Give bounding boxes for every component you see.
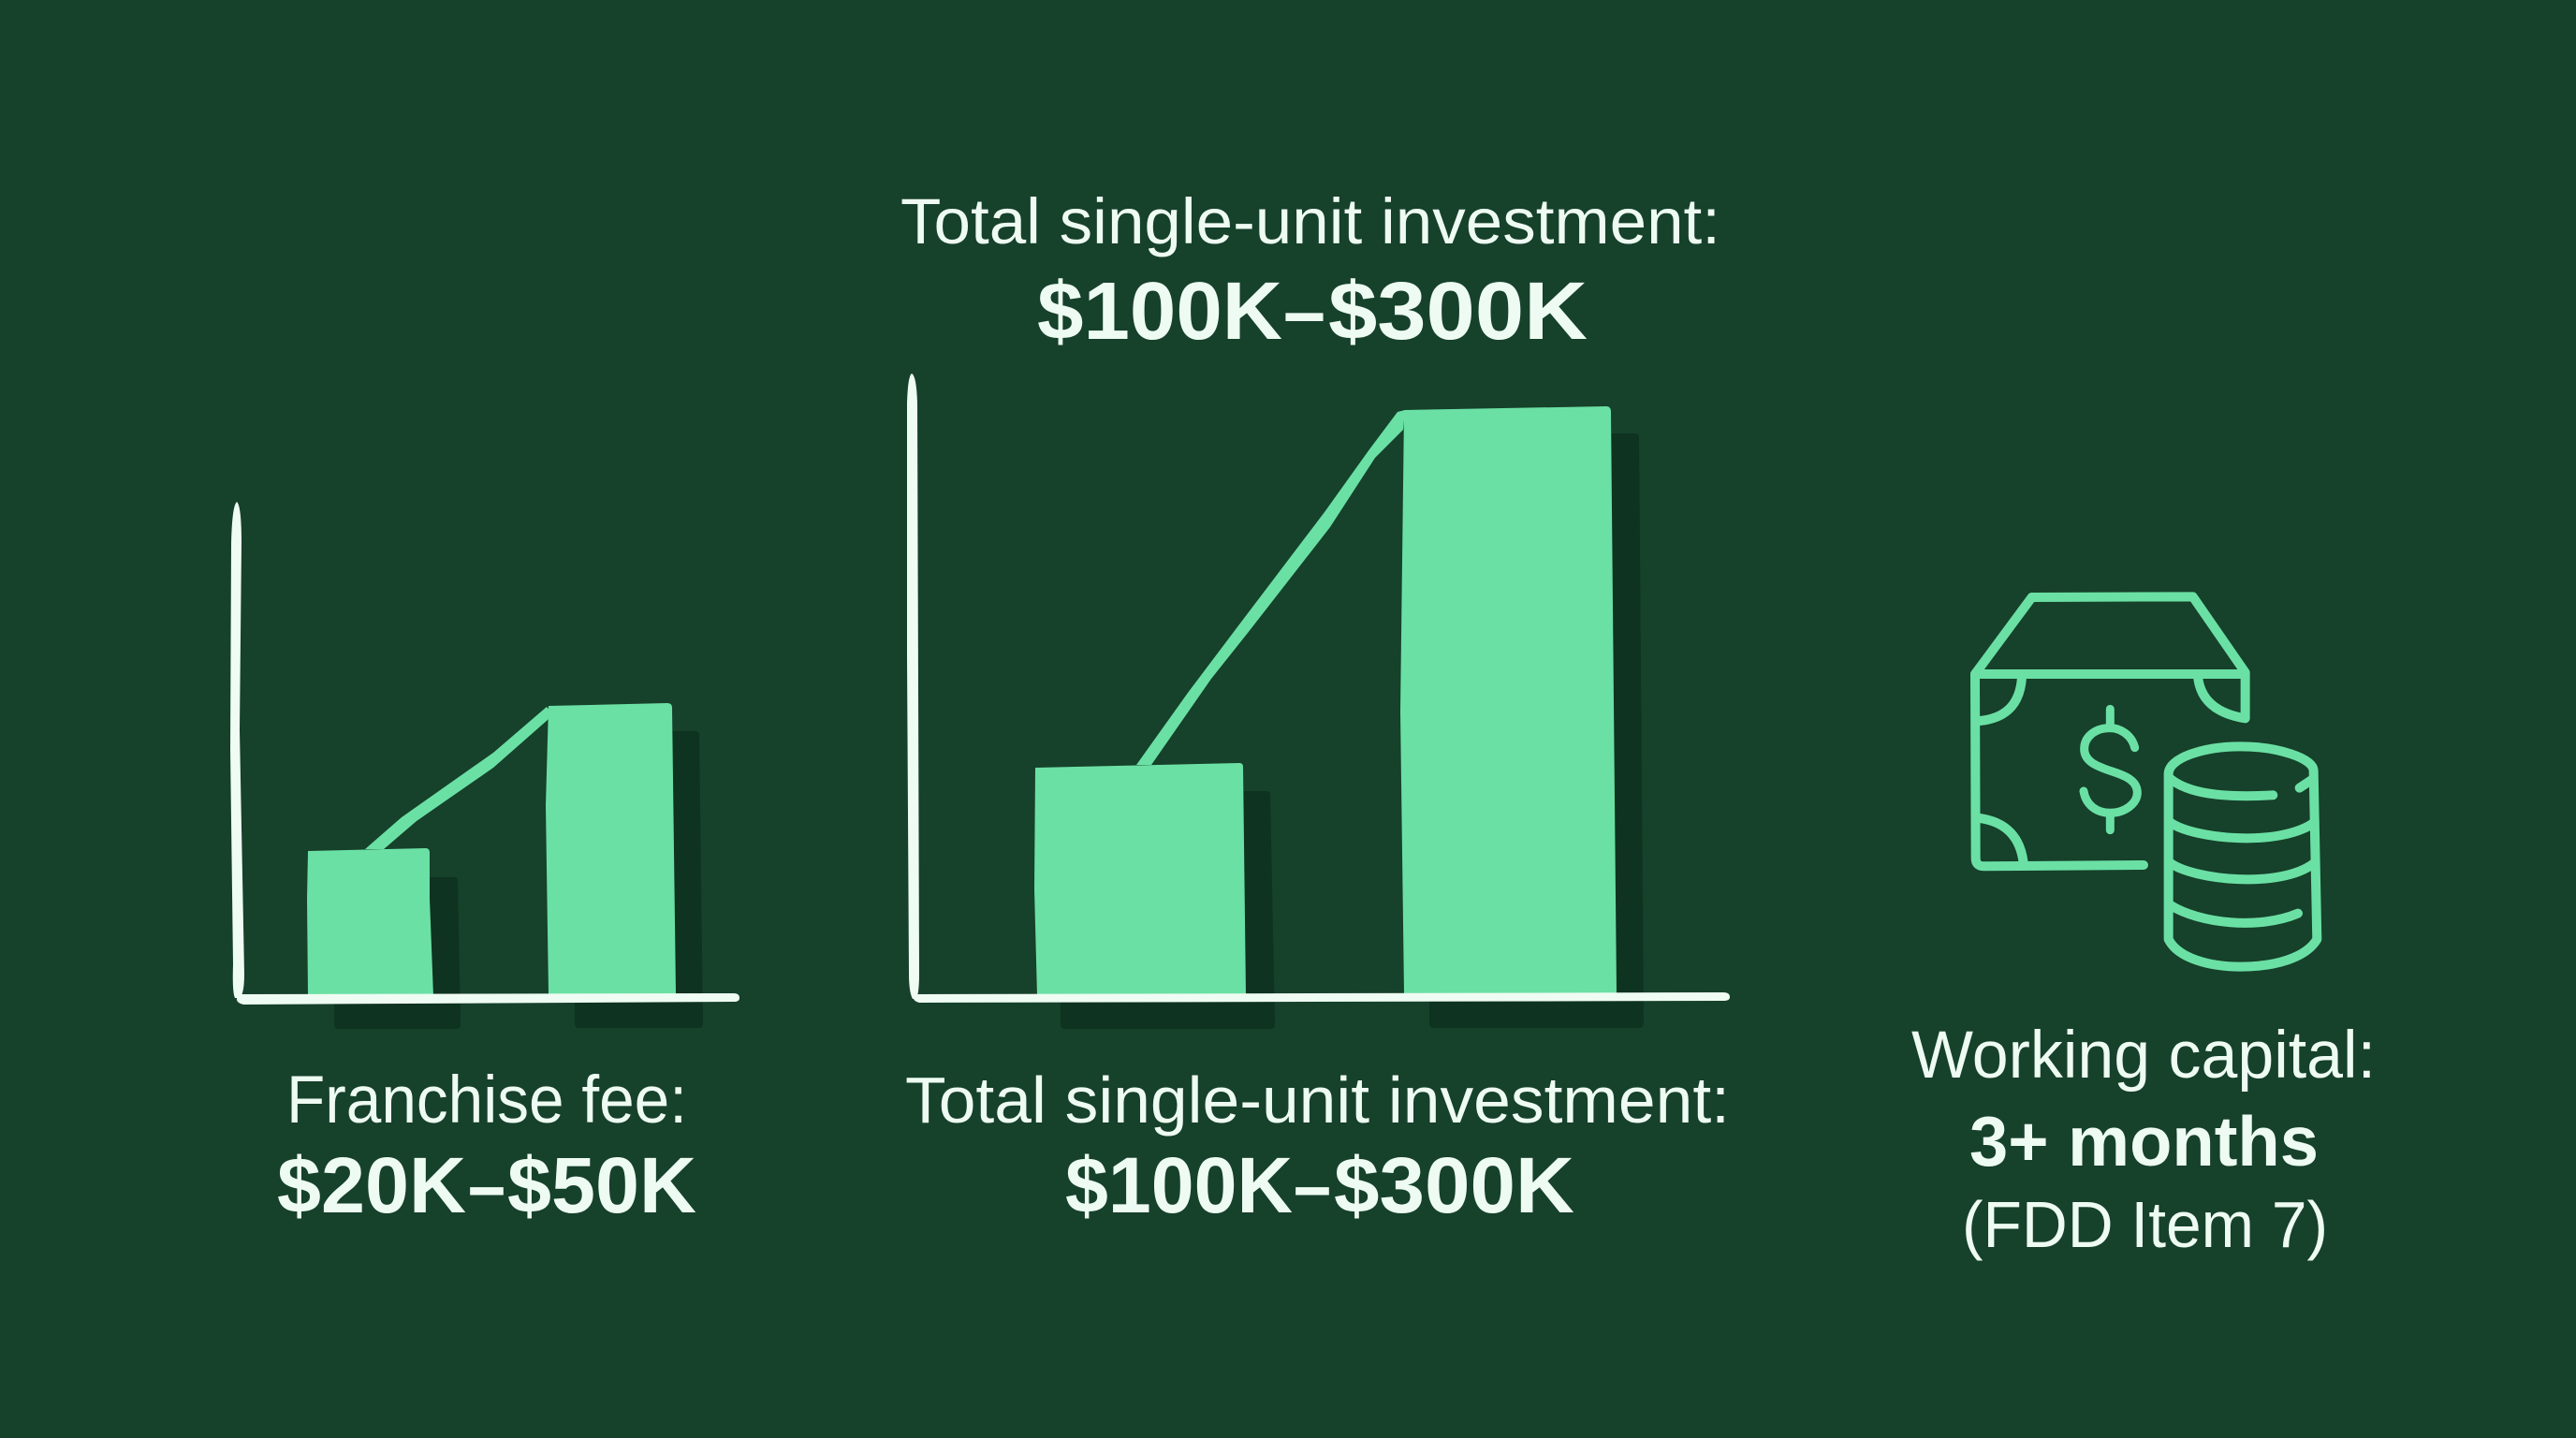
heading: total single-unit investment (top): $300K	[1328, 266, 1588, 357]
dollar sign	[2084, 709, 2137, 830]
label: franchise fee: $50K	[507, 1141, 696, 1229]
label: franchise fee: –	[468, 1141, 505, 1229]
bar shadows	[1061, 433, 1644, 1029]
coin stack	[2169, 746, 2317, 967]
bar: high value	[1400, 406, 1617, 994]
bar: low value	[307, 848, 433, 996]
label: total single-unit investment	[905, 1064, 1730, 1229]
bar shadows	[334, 731, 703, 1029]
label: franchise fee	[277, 1064, 696, 1229]
connector line	[365, 707, 552, 849]
axes	[230, 502, 244, 998]
label: total single-unit investment: $100K	[1065, 1141, 1293, 1229]
heading: total single-unit investment (top)	[900, 185, 1720, 357]
chart: total single-unit investment	[907, 374, 1730, 1029]
label: working capital: (FDD Item 7)	[1962, 1188, 2328, 1261]
label: franchise fee: Franchise fee:	[286, 1064, 687, 1137]
heading: total single-unit investment (top): –	[1283, 266, 1325, 357]
bar: high value	[546, 703, 676, 994]
label: total single-unit investment: Total single-unit investment:	[905, 1064, 1730, 1137]
heading: total single-unit investment (top): $100K	[1037, 266, 1282, 357]
chart: franchise fee	[230, 502, 739, 1029]
bar: low value	[1034, 763, 1246, 996]
label: working capital: 3+ months	[1969, 1102, 2319, 1181]
label: total single-unit investment: $300K	[1334, 1141, 1574, 1229]
heading: total single-unit investment (top): Total single-unit investment:	[900, 185, 1720, 257]
connector line	[1136, 410, 1405, 765]
label: franchise fee: $20K	[277, 1141, 466, 1229]
axes	[907, 374, 919, 999]
label: working capital: Working capital:	[1911, 1019, 2376, 1093]
banknote	[1975, 596, 2246, 866]
label: working capital	[1911, 1019, 2376, 1261]
icon: banknote and coin stack	[1975, 596, 2317, 967]
label: total single-unit investment: –	[1294, 1141, 1331, 1229]
